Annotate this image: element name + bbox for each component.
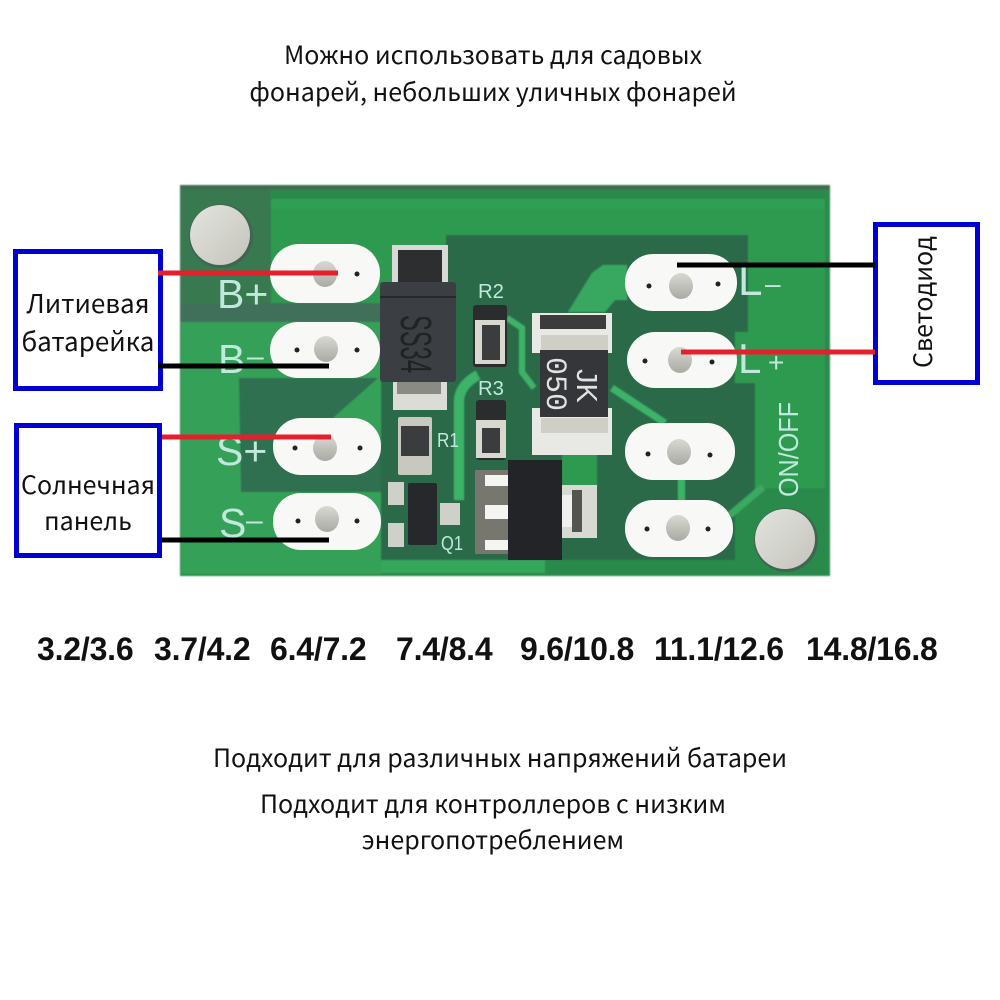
pad vias (292, 272, 720, 532)
pad holes (313, 261, 693, 541)
silkscreen labels: Q1 (441, 533, 463, 555)
box: lithium battery (13, 249, 163, 391)
voltage list: 6.4/7.2 (270, 631, 366, 667)
silkscreen labels: L (738, 256, 762, 305)
box: LED: Светодиод (904, 236, 940, 368)
voltage list: 11.1/12.6 (654, 631, 784, 667)
left lower copper (181, 322, 381, 574)
caption: low power controllers: энергопотреблением (362, 821, 624, 857)
silkscreen labels: + (768, 347, 784, 378)
caption: low power controllers (260, 785, 726, 857)
box: lithium battery: Литиевая (26, 284, 150, 321)
silkscreen labels (216, 256, 804, 555)
small resistors (398, 305, 507, 475)
box: solar panel: панель (44, 502, 132, 538)
voltage list: 14.8/16.8 (806, 631, 938, 667)
voltage list: 3.2/3.6 (37, 631, 133, 667)
wires (158, 265, 875, 540)
silkscreen labels: S+ (216, 428, 267, 474)
traces (459, 375, 478, 500)
solder pads (270, 244, 737, 557)
board base (180, 185, 830, 576)
title: Можно использовать для садовых (284, 36, 702, 72)
silkscreen labels: – (247, 340, 264, 373)
voltage list: 3.7/4.2 (154, 631, 250, 667)
left margin (180, 190, 271, 322)
shunt resistor JK 050: JK (570, 369, 602, 404)
shunt resistor JK 050: 050 (537, 357, 571, 411)
left strip between pads (180, 303, 382, 322)
mounting holes (189, 204, 818, 572)
silkscreen labels: R3 (478, 378, 504, 400)
voltage list: 7.4/8.4 (396, 631, 492, 667)
box: lithium battery: батарейка (22, 322, 154, 359)
bottom bright strip (381, 560, 545, 573)
diode SS34: SS34 (391, 315, 440, 373)
caption: low power controllers: Подходит для контроллеров с низким (260, 785, 726, 821)
box: LED (873, 222, 980, 385)
silkscreen labels: B+ (217, 271, 268, 317)
silkscreen labels: – (765, 268, 781, 299)
voltage list: 9.6/10.8 (520, 631, 634, 667)
diode SS34 (380, 245, 456, 410)
silkscreen labels: L (738, 335, 761, 382)
PCB (180, 185, 830, 576)
silkscreen labels: R1 (437, 430, 459, 452)
voltage list (37, 631, 938, 667)
box: solar panel: Солнечная (21, 466, 155, 502)
title: фонарей, небольших уличных фонарей (249, 73, 737, 109)
top band shade (271, 199, 825, 209)
regulator chip (475, 460, 597, 560)
top and right copper (271, 199, 825, 488)
shunt resistor JK 050 (532, 313, 612, 455)
box: solar panel (14, 423, 162, 558)
silkscreen labels: B (218, 336, 245, 382)
dark block left (239, 378, 381, 492)
transistor Q1 (388, 482, 460, 547)
silkscreen labels: – (246, 504, 263, 537)
dark region centre (381, 235, 755, 560)
silkscreen labels: S (219, 500, 246, 546)
silkscreen labels: R2 (478, 281, 504, 303)
silkscreen labels: ON/OFF (773, 402, 804, 497)
title (249, 36, 737, 109)
caption: battery voltages: Подходит для различных напряжений батареи (213, 739, 787, 775)
